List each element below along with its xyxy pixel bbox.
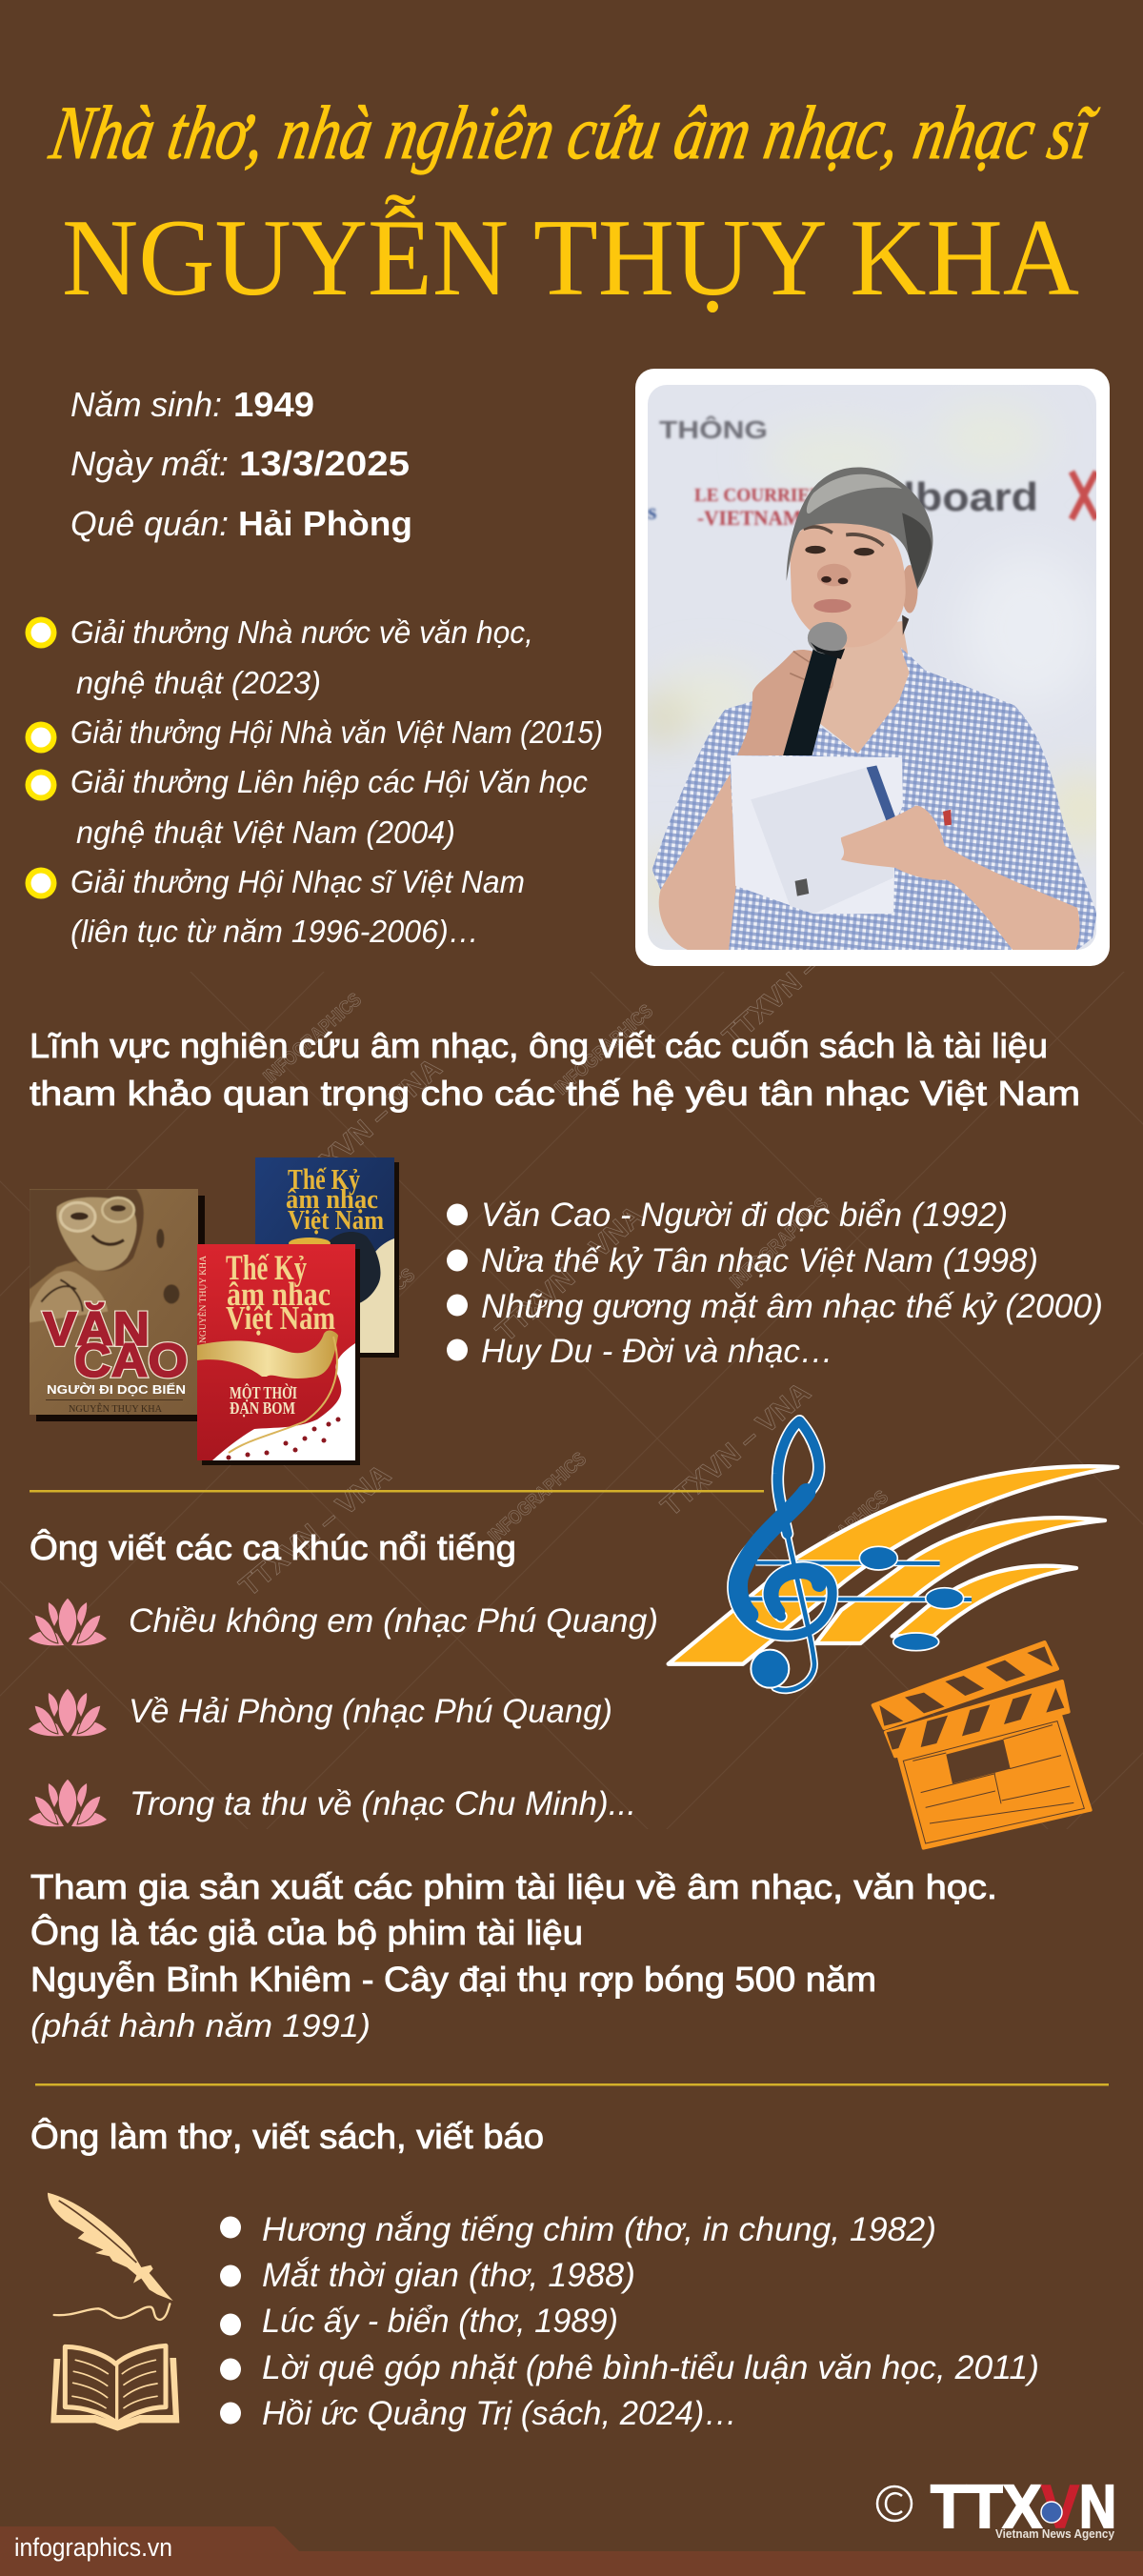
- copyright symbol: [877, 2486, 912, 2521]
- right hand and forearm: [841, 806, 1080, 950]
- text block: documentary films: (phát hành năm 1991): [30, 2008, 371, 2044]
- infographic canvas: INFOGRAPHICS: [313, 1264, 419, 1363]
- book: Thế kỷ âm nhạc Việt Nam (blue): [255, 1157, 399, 1358]
- portrait photo with white frame: lboard: [903, 474, 1038, 519]
- biography facts: 13/3/2025: [239, 444, 410, 483]
- left forearm: [659, 774, 736, 950]
- infographic canvas: TTXVN – VNA: [655, 1377, 817, 1522]
- book: Thế kỷ âm nhạc Việt Nam - Một thời đạn bom (red): Thế Kỷ: [226, 1249, 307, 1288]
- biography facts: Quê quán:: [70, 504, 229, 543]
- song list: [29, 1598, 658, 1826]
- award list: Giải thưởng Hội Nhà văn Việt Nam (2015): [70, 714, 603, 750]
- book list: Nửa thế kỷ Tân nhạc Việt Nam (1998): [481, 1242, 1038, 1279]
- portrait photo with white frame: -VIETNAM: [697, 506, 802, 530]
- infographic canvas: INFOGRAPHICS: [727, 1194, 832, 1293]
- award list: [25, 614, 603, 949]
- icon: lotus: [29, 1598, 107, 1645]
- logo: TTXVN Vietnam News Agency: V: [1041, 2472, 1079, 2541]
- man figure: [652, 467, 1096, 950]
- icon: lotus: [29, 1779, 107, 1826]
- infographic canvas: INFOGRAPHICS: [260, 989, 366, 1088]
- logo: TTXVN Vietnam News Agency: Vietnam News Agency: [995, 2526, 1115, 2541]
- heading: songs: Ông viết các ca khúc nổi tiếng: [30, 1528, 516, 1567]
- book: Thế kỷ âm nhạc Việt Nam - Một thời đạn bom (red): [197, 1244, 360, 1465]
- biography facts: 1949: [233, 385, 314, 424]
- infographic canvas: INFOGRAPHICS: [787, 1486, 892, 1585]
- song list: Chiều không em (nhạc Phú Quang): [129, 1602, 658, 1640]
- writing list: Hương nắng tiếng chim (thơ, in chung, 1982): [262, 2211, 936, 2248]
- portrait photo with white frame: s: [648, 500, 656, 525]
- book: Văn Cao người đi dọc biển: CAO: [74, 1334, 188, 1387]
- infographic canvas: INFOGRAPHICS: [485, 1448, 591, 1547]
- text block: documentary films: [30, 1867, 997, 2044]
- book list: Những gương mặt âm nhạc thế kỷ (2000): [481, 1288, 1103, 1325]
- biography facts: Năm sinh:: [70, 385, 222, 424]
- book: Thế kỷ âm nhạc Việt Nam - Một thời đạn bom (red): NGUYỄN THỤY KHA: [197, 1255, 208, 1343]
- icon: treble clef with musical staff ribbons: [669, 1421, 1117, 1690]
- book: Văn Cao người đi dọc biển: VĂN: [43, 1302, 150, 1356]
- logo: TTXVN Vietnam News Agency: TTX: [931, 2472, 1042, 2541]
- footer website: infographics.vn: [14, 2533, 172, 2562]
- text block: documentary films: Ông là tác giả của bộ phim tài liệu: [30, 1913, 583, 1952]
- portrait photo with white frame: LE COURRIER: [694, 485, 824, 506]
- book: Thế kỷ âm nhạc Việt Nam (blue): âm nhạc: [286, 1184, 378, 1215]
- staff lines and notes: [743, 1546, 972, 1651]
- biography facts: Ngày mất:: [70, 444, 229, 483]
- award list: nghệ thuật (2023): [76, 665, 321, 700]
- song list: Trong ta thu về (nhạc Chu Minh)...: [130, 1785, 636, 1822]
- left hand: [737, 650, 833, 755]
- book list: [447, 1197, 1103, 1370]
- book: Văn Cao người đi dọc biển: [30, 1189, 205, 1421]
- book list bullets: [447, 1204, 468, 1360]
- biography facts: [70, 385, 412, 543]
- title: name: NGUYỄN THỤY KHA: [62, 195, 1079, 318]
- book: Thế kỷ âm nhạc Việt Nam - Một thời đạn bom (red): Việt Nam: [226, 1299, 335, 1337]
- writing list: Lời quê góp nhặt (phê bình-tiểu luận văn học, 2011): [262, 2349, 1039, 2386]
- paper sheets: [731, 755, 903, 914]
- award bullets: [25, 617, 57, 899]
- song list: Về Hải Phòng (nhạc Phú Quang): [129, 1693, 612, 1730]
- writing list: [220, 2211, 1039, 2432]
- writing list: Hồi ức Quảng Trị (sách, 2024)…: [262, 2395, 737, 2432]
- writing list bullets: [220, 2216, 241, 2424]
- icon: film clapperboard: [873, 1642, 1091, 1848]
- text block: documentary films: Tham gia sản xuất các phim tài liệu về âm nhạc, văn học.: [30, 1867, 997, 1906]
- book: Văn Cao người đi dọc biển: CAO: [74, 1334, 188, 1387]
- portrait photo with white frame: [635, 369, 1119, 966]
- book: Văn Cao người đi dọc biển: NGƯỜI ĐI DỌC BIỂN: [47, 1382, 186, 1397]
- writing list: Mắt thời gian (thơ, 1988): [262, 2257, 635, 2294]
- book list: Văn Cao - Người đi dọc biển (1992): [481, 1197, 1008, 1234]
- book list: Huy Du - Đời và nhạc…: [481, 1333, 833, 1370]
- award list: Giải thưởng Nhà nước về văn học,: [70, 614, 533, 650]
- microphone: [783, 647, 837, 755]
- footer band: [0, 2526, 1143, 2576]
- writing list: Lúc ấy - biển (thơ, 1989): [262, 2303, 618, 2340]
- hair: [787, 467, 932, 589]
- book: Thế kỷ âm nhạc Việt Nam (blue): Việt Nam: [288, 1205, 384, 1236]
- book: Thế kỷ âm nhạc Việt Nam - Một thời đạn bom (red): MỘT THỜI: [230, 1382, 297, 1402]
- logo: TTXVN Vietnam News Agency: [931, 2472, 1116, 2541]
- book: Thế kỷ âm nhạc Việt Nam - Một thời đạn bom (red): âm nhạc: [227, 1276, 331, 1313]
- book: Văn Cao người đi dọc biển: NGUYỄN THỤY KHA: [69, 1402, 162, 1415]
- logo: TTXVN Vietnam News Agency: N: [1079, 2472, 1116, 2541]
- icon: open book: [50, 2345, 179, 2431]
- infographic canvas: TTXVN – VNA: [289, 1053, 448, 1200]
- infographic canvas: TTXVN – VNA: [717, 905, 876, 1053]
- text block: documentary films: Nguyễn Bỉnh Khiêm - Cây đại thụ rợp bóng 500 năm: [30, 1960, 876, 1999]
- book: Thế kỷ âm nhạc Việt Nam - Một thời đạn bom (red): ĐẠN BOM: [230, 1399, 295, 1418]
- award list: Giải thưởng Hội Nhạc sĩ Việt Nam: [70, 864, 525, 899]
- heading: music research: Lĩnh vực nghiên cứu âm nhạc, ông viết các cuốn sách là tài liệu: [30, 1026, 1048, 1065]
- heading: music research: tham khảo quan trọng cho các thế hệ yêu tân nhạc Việt Nam: [30, 1074, 1080, 1113]
- shirt: [652, 647, 1096, 950]
- book: Thế kỷ âm nhạc Việt Nam (blue): Thế Kỷ: [288, 1162, 360, 1196]
- icon: lotus: [29, 1688, 107, 1736]
- ear: [901, 565, 918, 614]
- biography facts: Hải Phòng: [238, 504, 412, 543]
- ribbons: [669, 1466, 1117, 1664]
- face: [790, 518, 906, 647]
- award list: (liên tục từ năm 1996-2006)…: [70, 914, 479, 949]
- book: Văn Cao người đi dọc biển: VĂN: [43, 1302, 150, 1356]
- award list: Giải thưởng Liên hiệp các Hội Văn học: [70, 764, 588, 799]
- heading: poetry and writing: Ông làm thơ, viết sách, viết báo: [30, 2117, 544, 2156]
- infographic canvas: TTXVN – VNA: [233, 1459, 397, 1602]
- icon: quill pen: [48, 2193, 173, 2320]
- book covers: [30, 1157, 399, 1465]
- heading: music research: [30, 1026, 1080, 1113]
- infographic canvas: INFOGRAPHICS: [551, 1000, 657, 1099]
- clef: [733, 1421, 832, 1690]
- portrait photo with white frame: THÔNG: [659, 415, 768, 444]
- infographic canvas: TTXVN – VNA: [491, 1200, 650, 1348]
- neck: [813, 621, 911, 754]
- award list: nghệ thuật Việt Nam (2004): [76, 815, 455, 850]
